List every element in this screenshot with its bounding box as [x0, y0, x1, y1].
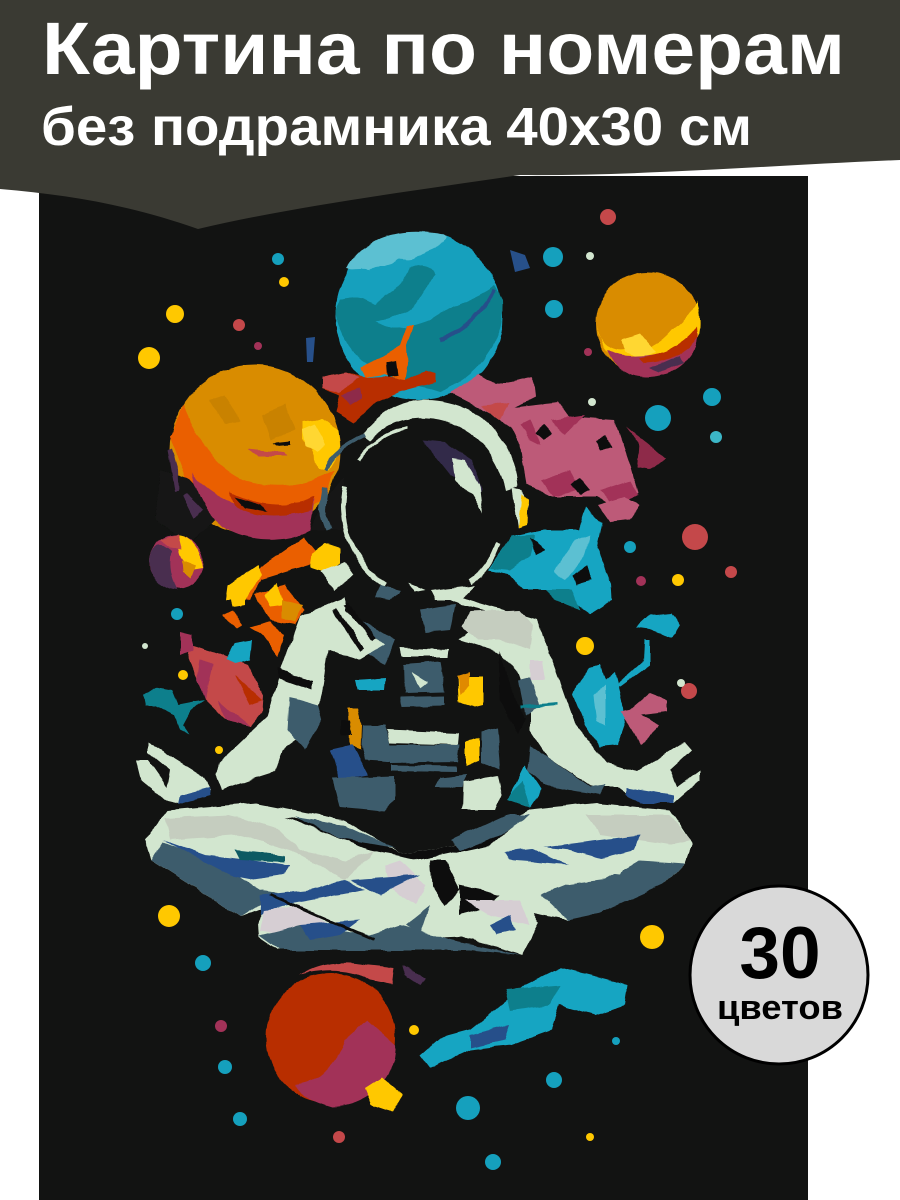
nebula: blue right lower: [507, 613, 680, 808]
astronaut: [136, 400, 700, 955]
planet: top teal: [322, 232, 503, 423]
planet: bottom red: [266, 963, 425, 1112]
badge number: 30: [739, 913, 821, 994]
left arm: [216, 597, 385, 790]
painting background: [39, 176, 808, 1200]
helmet: [362, 400, 518, 491]
left hand: [136, 742, 211, 803]
planet: left orange: [155, 365, 345, 545]
subtitle: без подрамника 40х30 см: [41, 97, 752, 157]
title: Картина по номерам: [42, 7, 845, 90]
nebula: orange left: [222, 537, 340, 657]
planet: small left: [149, 534, 203, 591]
planet: top right yellow: [596, 272, 700, 377]
stars: dots: [138, 209, 737, 1170]
nebula: pink: [451, 374, 665, 522]
badge: 30 colours: [690, 886, 868, 1064]
legs: [145, 803, 692, 955]
nebula: red left: [143, 632, 263, 735]
badge label: цветов: [717, 989, 843, 1027]
artwork: [136, 232, 700, 1112]
chest details: [330, 605, 502, 812]
nebula: blue right: [488, 507, 612, 614]
nebula: blue bottom: [420, 968, 628, 1068]
header banner: [0, 0, 900, 229]
right arm: [433, 590, 700, 803]
